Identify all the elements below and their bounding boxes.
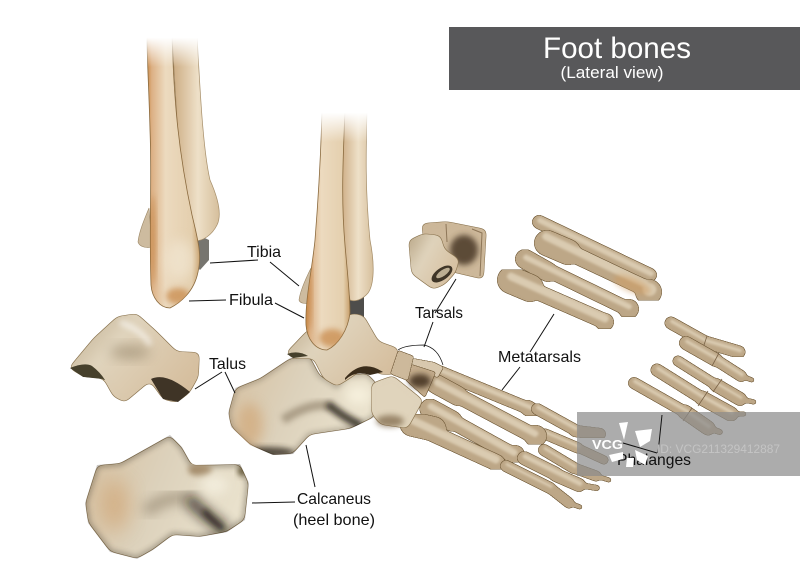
label: Tarsals: Tarsals xyxy=(415,305,463,322)
bones: separated tarsals xyxy=(408,221,487,290)
label: Phalanges xyxy=(617,415,691,469)
bone: cuboid xyxy=(371,375,424,429)
bone: dark talus joint, left xyxy=(192,232,209,270)
bone: dark cuneiform xyxy=(405,364,436,398)
label: Talus: Talus xyxy=(209,356,246,373)
title text: Foot bones xyxy=(543,32,691,65)
bone: talus xyxy=(285,313,399,387)
bone: phalanx row 2 xyxy=(686,342,752,380)
bone: dark ankle joint xyxy=(345,295,364,322)
banner background xyxy=(449,27,800,90)
bone: toe 2 xyxy=(545,432,604,460)
bone: small tarsal strip xyxy=(410,358,444,378)
watermark logo xyxy=(592,422,652,467)
label: Talus xyxy=(195,356,246,393)
illustration: separated lower leg bones xyxy=(135,25,219,308)
watermark band xyxy=(577,412,800,476)
watermark ID text: ID: VCG211329412887 xyxy=(657,444,780,456)
bone: metatarsal 3 xyxy=(430,406,515,455)
bone: tibia xyxy=(306,110,350,350)
bone: toe 4 xyxy=(524,456,597,488)
bone: talus front shadow xyxy=(287,352,308,358)
bone: back of fibula xyxy=(299,268,312,304)
bone: cuneiforms xyxy=(421,221,487,280)
label: Metatarsals: Metatarsals xyxy=(498,349,581,366)
bone: toe 1 xyxy=(537,408,600,434)
bone: metatarsal 2 xyxy=(436,382,536,436)
watermark logo: VCG xyxy=(592,437,623,452)
bone: metatarsal 4 xyxy=(510,276,605,322)
label: Tibia: Tibia xyxy=(247,244,281,261)
title banner xyxy=(449,27,800,90)
bone: navicular block xyxy=(390,350,414,381)
bone: toe 3 xyxy=(544,448,609,480)
label: Fibula: Fibula xyxy=(229,292,273,309)
bone: toe 5 xyxy=(506,464,580,507)
label: Fibula xyxy=(189,292,304,318)
bone: phalanx row 4 xyxy=(657,368,744,414)
bone: phalanx row 3 xyxy=(678,360,754,402)
bone: separated talus xyxy=(68,313,200,403)
label: Calcaneus (heel bone): Calcaneus xyxy=(297,491,371,508)
label: Phalanges: Phalanges xyxy=(617,452,691,469)
fade at top of left leg xyxy=(135,25,215,67)
subtitle text: (Lateral view) xyxy=(560,63,664,82)
bone: front shaft, left xyxy=(147,35,200,308)
bone: back of fibula, left xyxy=(138,208,152,247)
bone: metatarsal 3 xyxy=(525,258,629,309)
bone: fibula xyxy=(340,110,373,301)
label: Calcaneus (heel bone) xyxy=(252,445,375,529)
label: Tibia xyxy=(210,244,299,286)
bone: navicular xyxy=(408,233,460,290)
illustration: assembled foot skeleton xyxy=(228,100,609,507)
bone: metatarsal 1 xyxy=(440,370,531,410)
bone: calcaneus xyxy=(228,356,377,457)
bones: separated metatarsals xyxy=(510,220,653,322)
label: Tarsals xyxy=(398,279,463,365)
bone: phalanx row 5 xyxy=(634,382,720,432)
bone: metatarsal 2 xyxy=(545,236,650,292)
bone: phalanx row 1 xyxy=(671,322,740,352)
bone: metatarsal 4 xyxy=(412,420,497,463)
bone: separated calcaneus xyxy=(85,435,249,559)
bones: separated phalanges xyxy=(634,322,754,432)
label: Calcaneus (heel bone): (heel bone) xyxy=(293,512,375,529)
bone: talus underside shadow xyxy=(345,366,383,380)
bone: rear shaft, left xyxy=(172,35,219,241)
bone: metatarsal 1 xyxy=(539,220,651,275)
fade at top of right leg xyxy=(310,100,380,142)
label: Metatarsals xyxy=(498,314,581,390)
